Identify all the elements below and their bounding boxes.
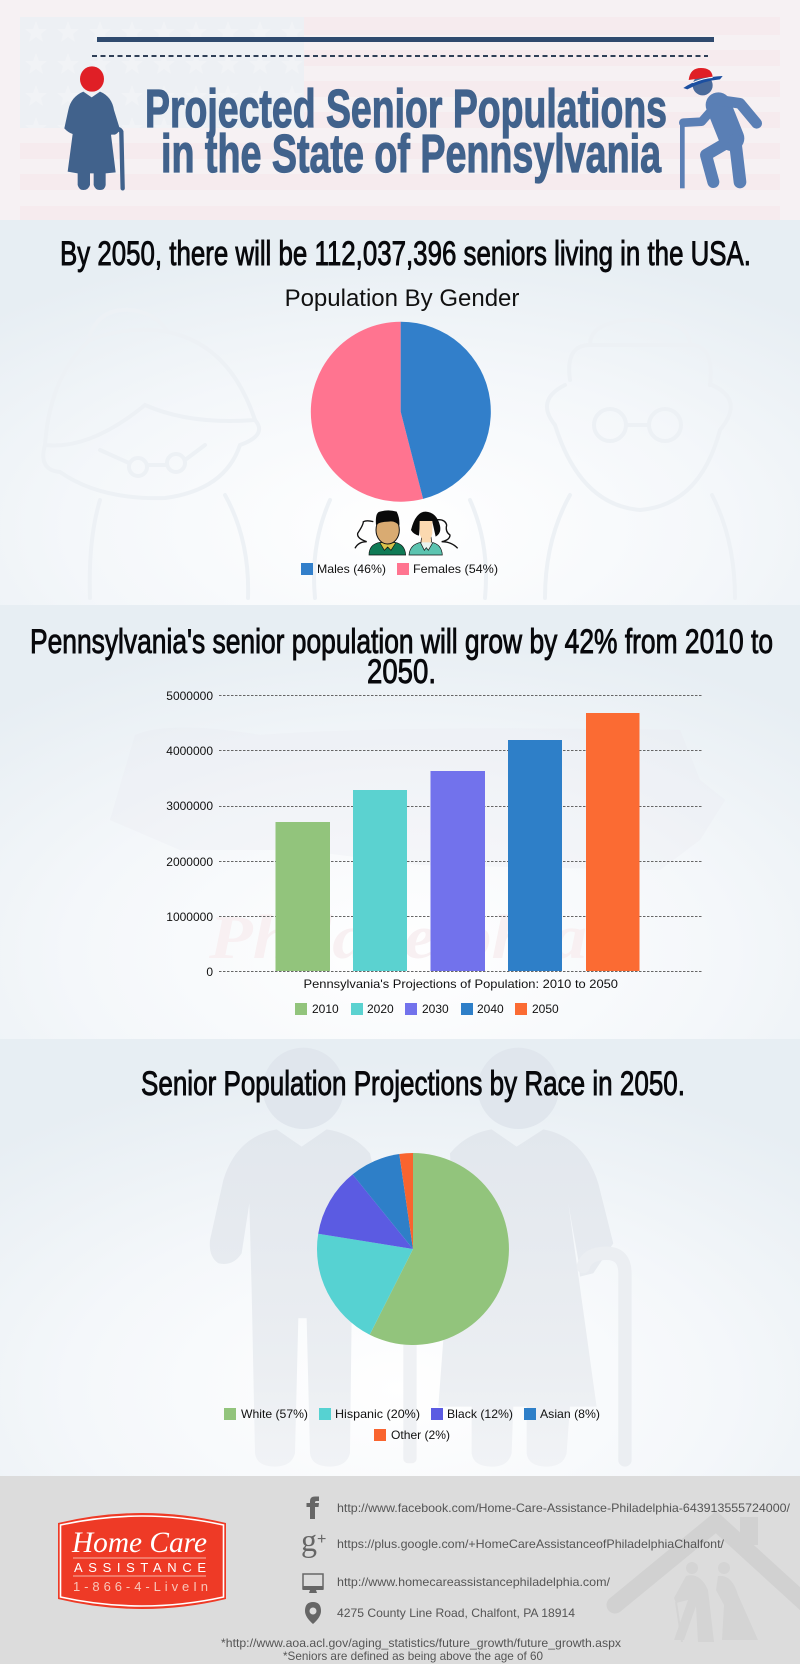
bar chart: projections 2010 to 2050: 4000000 <box>166 744 213 758</box>
legend: years: 2010 <box>312 1002 339 1016</box>
text: google plus link: https://plus.google.com/+HomeCareAssistanceofPhiladelphiaChalfont/ <box>337 1537 725 1551</box>
text: sources and definition: *http://www.aoa.acl.gov/aging_statistics/future_growth/future_growth.aspx <box>221 1636 621 1650</box>
pie chart: gender <box>311 322 491 502</box>
legend: race: Other (2%) <box>391 1428 450 1442</box>
heading: growth: 2050. <box>367 653 436 691</box>
icon: google plus: g <box>301 1522 317 1558</box>
legend: gender: Males (46%) <box>317 562 386 576</box>
legend: race: Black (12%) <box>447 1407 513 1421</box>
background: faint Philadelphia wordmark: Philadelphia <box>208 904 587 972</box>
bar chart: projections 2010 to 2050: 5000000 <box>166 689 213 703</box>
logo: Home Care Assistance <box>58 1513 226 1609</box>
panel: race <box>0 1039 800 1476</box>
logo: Home Care Assistance: 1-866-4-LiveIn <box>73 1579 208 1594</box>
legend: race: White (57%) <box>241 1407 308 1421</box>
icon: map pin <box>305 1602 321 1624</box>
bar chart: projections 2010 to 2050: 3000000 <box>166 799 213 813</box>
text: address: 4275 County Line Road, Chalfont, PA 18914 <box>337 1606 575 1620</box>
panel: gender <box>0 220 800 605</box>
text: website link: http://www.homecareassistancephiladelphia.com/ <box>337 1575 611 1589</box>
bar chart: projections 2010 to 2050: 0 <box>206 965 213 979</box>
background: house with seniors <box>615 1517 800 1642</box>
background: faint Pennsylvania map <box>110 728 725 870</box>
legend: years: 2040 <box>477 1002 504 1016</box>
panel: growth <box>0 605 800 1039</box>
background: senior couple silhouette <box>210 1048 625 1467</box>
header background <box>0 0 800 220</box>
bar chart: projections 2010 to 2050: 2000000 <box>166 855 213 869</box>
bar chart: projections 2010 to 2050: Pennsylvania's Projections of Population: 2010 to 2050 <box>304 977 618 991</box>
panel: footer <box>0 1476 800 1664</box>
icon: facebook <box>306 1496 319 1519</box>
logo: Home Care Assistance: ASSISTANCE <box>74 1560 206 1575</box>
icon: google plus <box>301 1522 326 1558</box>
text: sources and definition <box>221 1636 621 1663</box>
chart title: Population By Gender <box>285 285 519 312</box>
pie chart: race <box>317 1153 509 1345</box>
icon: google plus: + <box>317 1531 326 1548</box>
flag backdrop <box>20 17 780 220</box>
legend: years: 2030 <box>422 1002 449 1016</box>
legend: years: 2020 <box>367 1002 394 1016</box>
icon: male and female <box>355 510 458 555</box>
icon: elderly woman with cane <box>64 66 123 190</box>
background: faint senior outlines <box>43 310 735 598</box>
legend: gender <box>301 562 498 576</box>
legend: years: 2050 <box>532 1002 559 1016</box>
legend: years <box>295 1002 559 1016</box>
bar chart: projections 2010 to 2050: 1000000 <box>166 910 213 924</box>
legend: race: Hispanic (20%) <box>335 1407 420 1421</box>
icon: monitor <box>303 1574 323 1593</box>
icon: elderly man with cane and hat <box>680 68 757 188</box>
text: facebook link: http://www.facebook.com/Home-Care-Assistance-Philadelphia-643913555724000/ <box>337 1501 791 1515</box>
title <box>145 79 667 184</box>
bar chart: projections 2010 to 2050 <box>166 689 703 991</box>
heading: growth <box>30 623 773 691</box>
header top rule <box>97 37 714 42</box>
header dashed rule <box>92 55 708 57</box>
legend: race <box>224 1407 600 1442</box>
text: sources and definition: *Seniors are defined as being above the age of 60 <box>283 1649 543 1663</box>
legend: race: Asian (8%) <box>540 1407 600 1421</box>
logo: Home Care Assistance: Home Care <box>71 1526 207 1559</box>
legend: gender: Females (54%) <box>413 562 498 576</box>
